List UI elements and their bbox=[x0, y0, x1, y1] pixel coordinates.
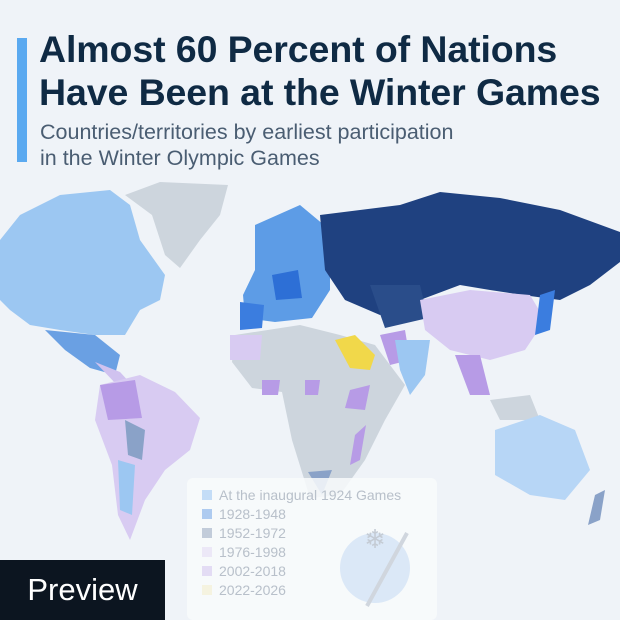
subtitle bbox=[40, 120, 453, 170]
legend bbox=[187, 478, 437, 620]
icon: winter sports: ❄ bbox=[364, 524, 386, 554]
legend items: 1976-1998 bbox=[219, 544, 286, 560]
Mexico bbox=[45, 330, 120, 375]
legend items bbox=[202, 487, 401, 598]
legend items: 2022-2026 bbox=[219, 582, 286, 598]
SE Asia bbox=[455, 355, 490, 395]
Greenland bbox=[125, 182, 228, 268]
legend items: 1952-1972 bbox=[219, 525, 286, 541]
accent bar bbox=[17, 38, 27, 162]
preview badge: Preview bbox=[27, 572, 138, 607]
Africa bbox=[232, 325, 405, 498]
Central America bbox=[95, 362, 132, 386]
Middle East / Arabia bbox=[335, 335, 375, 370]
China bbox=[420, 290, 545, 360]
title bbox=[39, 28, 601, 113]
Europe bbox=[243, 205, 330, 322]
legend items: 1928-1948 bbox=[219, 506, 286, 522]
subtitle: Countries/territories by earliest participation bbox=[40, 120, 453, 144]
Russia / Central Asia bbox=[320, 192, 620, 315]
title: Almost 60 Percent of Nations bbox=[39, 28, 557, 70]
icon: winter sports bbox=[340, 524, 410, 607]
legend items: 2002-2018 bbox=[219, 563, 286, 579]
preview badge bbox=[0, 560, 165, 620]
New Zealand bbox=[588, 490, 605, 525]
India bbox=[395, 340, 430, 395]
subtitle: in the Winter Olympic Games bbox=[40, 146, 320, 170]
South America bbox=[95, 375, 200, 540]
Australia bbox=[495, 415, 590, 500]
legend items: At the inaugural 1924 Games bbox=[219, 487, 401, 503]
North America bbox=[0, 190, 165, 335]
Japan bbox=[535, 290, 555, 335]
title: Have Been at the Winter Games bbox=[39, 71, 601, 113]
